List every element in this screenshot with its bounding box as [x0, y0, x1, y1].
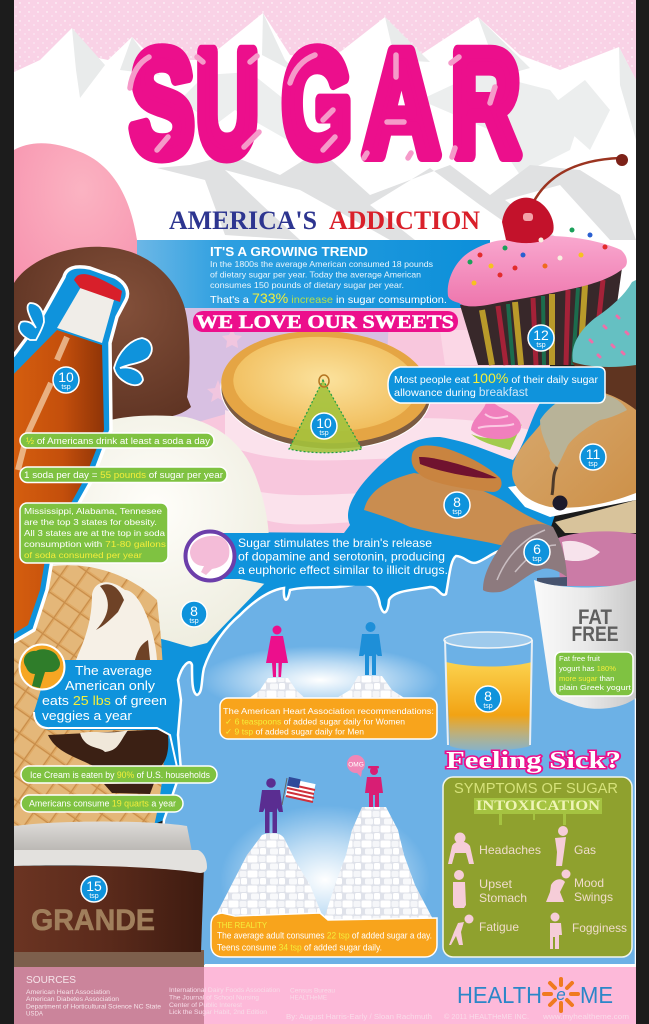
glass outline [445, 640, 532, 745]
logo letter e: e [556, 985, 566, 1004]
badge: yogurt 6 tsp: 6 [533, 541, 541, 557]
text: ice cream households pill [21, 766, 217, 783]
panel: american heart association recommendations: ✓ 9 tsp of added sugar daily for Men [225, 726, 364, 736]
chocolate wrapper [572, 358, 636, 410]
callout: omg bubble: OMG [348, 762, 364, 768]
sources column three: HEALTHeME [290, 994, 327, 1002]
callout: fat free yogurt: more sugar than [559, 674, 614, 683]
heading: it's a growing trend: IT'S A GROWING TREND [210, 244, 368, 259]
sugar cube pile woman [248, 678, 306, 699]
text block: consumption history: of dietary sugar per year. Today the average American [210, 270, 421, 280]
wrapper stripes second colour [498, 280, 603, 365]
badge: pie 10 tsp: 10 [316, 415, 332, 431]
subtitle: america's addiction: ADDICTION [329, 206, 480, 235]
lid top [14, 822, 192, 852]
symptom: gas [555, 826, 596, 866]
text block: consumption history: In the 1800s the average American consumed 18 pounds [210, 259, 433, 269]
title: sugar [130, 19, 520, 188]
title: sugar: S [130, 19, 194, 187]
meringue highlights [478, 414, 514, 428]
callout: 733 percent increase: That's a 733% increase in sugar comsumption. [210, 291, 447, 306]
illustration: chocolate dip [48, 729, 168, 771]
title: sugar: R [451, 19, 520, 187]
badge: cupcake 12 tsp [528, 325, 554, 351]
icon: woman figure [266, 626, 288, 677]
callout: daily sugar at breakfast: Most people eat 100% of their daily sugar [394, 370, 599, 386]
background: faded American flag [170, 300, 550, 560]
text: 19 quarts pill: Americans consume 19 quarts a year [29, 798, 176, 808]
pink frosting [448, 236, 627, 306]
title: sugar: G [282, 20, 352, 188]
pie crust [218, 326, 432, 448]
symptom: headaches [448, 832, 541, 864]
bottle orange body [0, 330, 104, 642]
text: obesity states box: of soda consumed per year [24, 550, 142, 560]
pie tin [218, 330, 434, 454]
illustration: vanilla ice cream scoop [40, 416, 269, 647]
juice liquid [446, 662, 532, 750]
background: dotted pink sky [14, 0, 636, 240]
text: obesity states box: All 3 states are at the top in soda [24, 528, 165, 538]
illustration: pie [218, 326, 434, 454]
illustration: grande coffee cup [14, 822, 207, 1024]
reality text: The average adult consumes 22 tsp of added sugar a day. [217, 930, 432, 940]
fat free label [572, 606, 618, 646]
muffin wrapper [555, 500, 636, 533]
muffin pale crumb [540, 393, 627, 467]
panel: blue band for brain statement [205, 533, 385, 586]
badge: juice 8 tsp: 8 [484, 688, 492, 704]
sources column one: Department of Horticultural Science NC State [26, 1004, 162, 1010]
cherry stem [533, 158, 620, 203]
symptom: upset stomach [453, 870, 527, 908]
logo: healtheme: ME [580, 982, 613, 1008]
cherry stem tip [616, 154, 628, 166]
badge: cupcake 12 tsp: 12 [533, 327, 549, 343]
illustration: yogurt cup [483, 524, 636, 709]
sources column two: The Journal of School Nursing [169, 994, 260, 1002]
wrapper stripes third colour [508, 288, 578, 365]
text: ice cream households pill: Ice Cream is eaten by 90% of U.S. households [30, 770, 211, 780]
background: left dark margin [0, 0, 14, 1024]
muffin blueberry [552, 496, 568, 510]
fat free label: FAT [578, 606, 612, 629]
teal frosting [572, 280, 636, 367]
text: brain release: Sugar stimulates the brain's release [238, 536, 432, 550]
text: soda pill 55 pounds [20, 467, 227, 482]
badge: juice 8 tsp: tsp [483, 703, 493, 710]
symptom: fogginess [550, 912, 627, 949]
badge: ice cream 8 tsp: tsp [189, 618, 199, 625]
banner: we love our sweets: WE LOVE OUR SWEETS [196, 312, 454, 333]
badge: cupcake 12 tsp: tsp [536, 342, 546, 349]
symptom: mood swings: Swings [574, 890, 613, 904]
sprinkles [468, 228, 608, 286]
reality text [217, 930, 432, 952]
symptom: fogginess: Fogginess [572, 921, 627, 935]
subtitle: america's addiction: AMERICA'S [169, 206, 317, 235]
badge: pie 10 tsp: tsp [319, 430, 329, 437]
panel: footer [14, 967, 636, 1024]
frosting pearls [590, 316, 628, 357]
badge: muffin 11 tsp: tsp [588, 461, 598, 468]
text: brain release: a euphoric effect similar to illicit drugs. [238, 563, 448, 577]
reality text: Teens consume 34 tsp of added sugar daily. [217, 942, 382, 952]
byline [286, 1012, 629, 1021]
illustration: chocolate swirl [96, 584, 150, 660]
title gloss highlights [130, 55, 495, 158]
byline: www.myhealtheme.com [542, 1012, 629, 1021]
sources column three [290, 988, 336, 1002]
illustration: soda bottle [0, 267, 128, 650]
footer pink left [14, 967, 204, 1024]
veggies text: The average [75, 663, 152, 678]
icon: american flag [282, 777, 316, 805]
cherry [502, 198, 554, 243]
sources column one: American Diabetes Association [26, 996, 120, 1003]
sources column two: International Dairy Foods Association [169, 987, 281, 994]
background: snowy sugar mountains [14, 13, 636, 300]
illustration: right sugar mountain with pink man [322, 755, 436, 925]
illustration: blueberry muffin [508, 392, 636, 533]
cup body [14, 866, 204, 952]
icon: pink man [365, 766, 383, 807]
badge: fig cookie 8 tsp: tsp [452, 509, 462, 516]
sleeve [14, 950, 204, 1024]
background: white glow behind recommendation figures [200, 646, 440, 714]
panel: american heart association recommendations [220, 622, 437, 739]
logo: healtheme: HEALTH [457, 982, 542, 1008]
callout: fat free yogurt: Fat free fruit [559, 654, 601, 663]
intoxication heading [474, 798, 602, 825]
illustration: small pink meringue [471, 400, 522, 450]
symptom: upset stomach: Stomach [479, 891, 527, 905]
illustration: left sugar mountain with purple man [216, 777, 322, 915]
glass rim [444, 632, 532, 648]
sources column one [26, 989, 162, 1018]
subtitle: america's addiction [169, 206, 480, 235]
cup body [534, 580, 636, 709]
badge: fig cookie 8 tsp [444, 492, 470, 518]
text: obesity states box: are the top 3 states for obesity. [24, 517, 157, 527]
icon: orange sun [544, 979, 578, 1011]
meringue wrapper [471, 424, 522, 450]
panel: american heart association recommendations: ✓ 6 teaspoons of added sugar daily for Women [225, 716, 405, 726]
bottle red cap [74, 274, 122, 302]
panel: american heart association recommendations: The American Heart Association recommendations: [223, 706, 434, 716]
illustration: soft-serve swirl [76, 582, 157, 660]
symptom: fatigue: Fatigue [479, 920, 519, 934]
illustration: teal cupcake [572, 280, 636, 410]
badge: fig cookie 8 tsp: 8 [453, 494, 461, 510]
panel: the reality [211, 913, 437, 957]
text: obesity states box [20, 503, 168, 563]
badge: pie 10 tsp [311, 413, 337, 439]
peeled lid [483, 524, 567, 592]
text: soda pill half of americans [20, 433, 214, 448]
background: white glow behind sugar mountains [220, 805, 430, 955]
panel: growing trend blue box [137, 240, 490, 308]
background: lower white stripe [205, 964, 636, 967]
callout: daily sugar at breakfast [388, 367, 605, 403]
symptom: gas: Gas [574, 843, 596, 857]
bottle highlight [18, 337, 67, 470]
blue box [34, 660, 170, 735]
illustration: chocolate streak on cone [104, 783, 154, 794]
lid streaks [497, 530, 556, 580]
byline: By: August Harris-Early / Sloan Rachmuth [286, 1012, 432, 1021]
muffin split [552, 467, 557, 495]
background: right dark margin [636, 0, 649, 1024]
pie filling [231, 332, 420, 436]
wrapper stripes [482, 285, 585, 365]
sources column one: American Heart Association [26, 989, 111, 996]
illustration: dark blue syrup blob around cookies [150, 400, 600, 826]
cherry highlight [523, 213, 533, 221]
symptom: mood swings: Mood [574, 876, 604, 890]
text: brain release [238, 536, 448, 577]
orange box [220, 698, 437, 739]
intoxication heading: INTOXICATION [476, 798, 601, 814]
footer pink right [204, 967, 636, 1024]
callout: omg bubble [347, 755, 365, 777]
veggies text: veggies a year [42, 708, 133, 723]
icon: brain [186, 532, 234, 580]
callout: fat free yogurt: plain Greek yogurt [559, 683, 632, 692]
pie slice highlighted [289, 380, 362, 453]
background: light blue lower panel [150, 548, 636, 966]
badge: soda 10 tsp: tsp [61, 384, 71, 391]
veggies text: eats 25 lbs of green [42, 693, 167, 708]
muffin paper [508, 470, 636, 517]
text block: consumption history: consumes 150 pounds of dietary sugar per year. [210, 280, 404, 290]
text: obesity states box: consumption with 71-80 gallons [24, 539, 166, 549]
logo: healtheme [457, 979, 613, 1011]
sources heading: SOURCES [26, 974, 76, 986]
title: sugar: A [363, 19, 440, 187]
badge: grande 15 tsp [81, 876, 107, 902]
illustration: fig cookie bottom [364, 473, 553, 545]
illustration: cherry cupcake [448, 154, 628, 365]
bottle outline [0, 267, 128, 650]
badge: muffin 11 tsp [580, 444, 606, 470]
text block: consumption history [210, 259, 433, 290]
panel: symptoms of sugar intoxication [443, 777, 632, 957]
grande label: GRANDE [31, 904, 155, 937]
sugar cube pile man [335, 676, 406, 699]
illustration: fig cookie top [412, 446, 502, 492]
sources column three: Census Bureau [290, 988, 336, 994]
badge: muffin 11 tsp: 11 [586, 446, 600, 462]
text: soda pill half of americans: ½ of Americans drink at least a soda a day [26, 436, 211, 446]
symptom: fatigue [449, 914, 519, 945]
byline: © 2011 HEALTHeME INC. [444, 1012, 529, 1021]
callout: green veggies [20, 644, 177, 767]
symptoms heading: SYMPTOMS OF SUGAR [454, 780, 618, 797]
callout: daily sugar at breakfast: allowance during breakfast [394, 387, 529, 399]
badge: ice cream 8 tsp [181, 601, 207, 627]
badge: soda 10 tsp [53, 367, 79, 393]
lid rim [14, 850, 207, 873]
symptom: upset stomach: Upset [479, 877, 513, 891]
symptom: mood swings [546, 870, 613, 904]
badge: soda 10 tsp: 10 [58, 369, 74, 385]
callout: fat free yogurt [555, 652, 633, 696]
sources column one: USDA [26, 1010, 44, 1018]
icon: man figure [359, 622, 382, 675]
sources column two: Center of Public Interest [169, 1002, 242, 1009]
text: brain release: of dopamine and serotonin, producing [238, 550, 445, 564]
illustration: glass of orange juice [444, 632, 532, 750]
text: obesity states box: Mississippi, Alabama, Tennesee [24, 506, 162, 516]
badge: yogurt 6 tsp [524, 539, 550, 565]
symptom: headaches: Headaches [479, 843, 541, 857]
icon: blue splash left of bottle [19, 303, 44, 340]
illustration: pink ice cream scoop [14, 143, 137, 300]
icon: broccoli [20, 644, 64, 690]
box white lower edge [34, 712, 177, 767]
yogurt contents [558, 531, 636, 586]
muffin top [512, 392, 636, 508]
icon: blue splash right of bottle [114, 338, 152, 385]
illustration: cream in chocolate dip [80, 730, 128, 752]
yogurt cream [562, 541, 600, 561]
pie vent [319, 375, 329, 387]
sources column two: Lick the Sugar Habit, 2nd Edition [169, 1009, 268, 1016]
callout: fat free yogurt: yogurt has 180% [559, 664, 616, 673]
badge: ice cream 8 tsp: 8 [190, 603, 198, 619]
badge: yogurt 6 tsp: tsp [532, 556, 542, 563]
bottle white neck [57, 287, 114, 343]
illustration: waffle cone [14, 565, 165, 826]
veggies text: American only [65, 678, 156, 693]
sources column two [169, 987, 281, 1016]
reality heading: THE REALITY [217, 920, 267, 930]
text: 19 quarts pill [21, 795, 183, 812]
fat free label: FREE [572, 623, 618, 646]
badge: grande 15 tsp: 15 [86, 878, 102, 894]
badge: juice 8 tsp [475, 686, 501, 712]
veggies text [42, 663, 167, 723]
text: soda pill 55 pounds: 1 soda per day = 55 pounds of sugar per year [24, 470, 223, 480]
panel: dopamine statement [186, 532, 448, 580]
cup inner shadow [537, 577, 567, 586]
icon: purple man [259, 778, 283, 833]
illustration: chocolate ice cream scoop [14, 247, 191, 420]
striped wrapper [460, 268, 622, 365]
heading: feeling sick: Feeling Sick? [446, 748, 621, 774]
title: sugar: U [196, 19, 259, 187]
badge: grande 15 tsp: tsp [89, 893, 99, 900]
meringue swirl [471, 400, 521, 439]
